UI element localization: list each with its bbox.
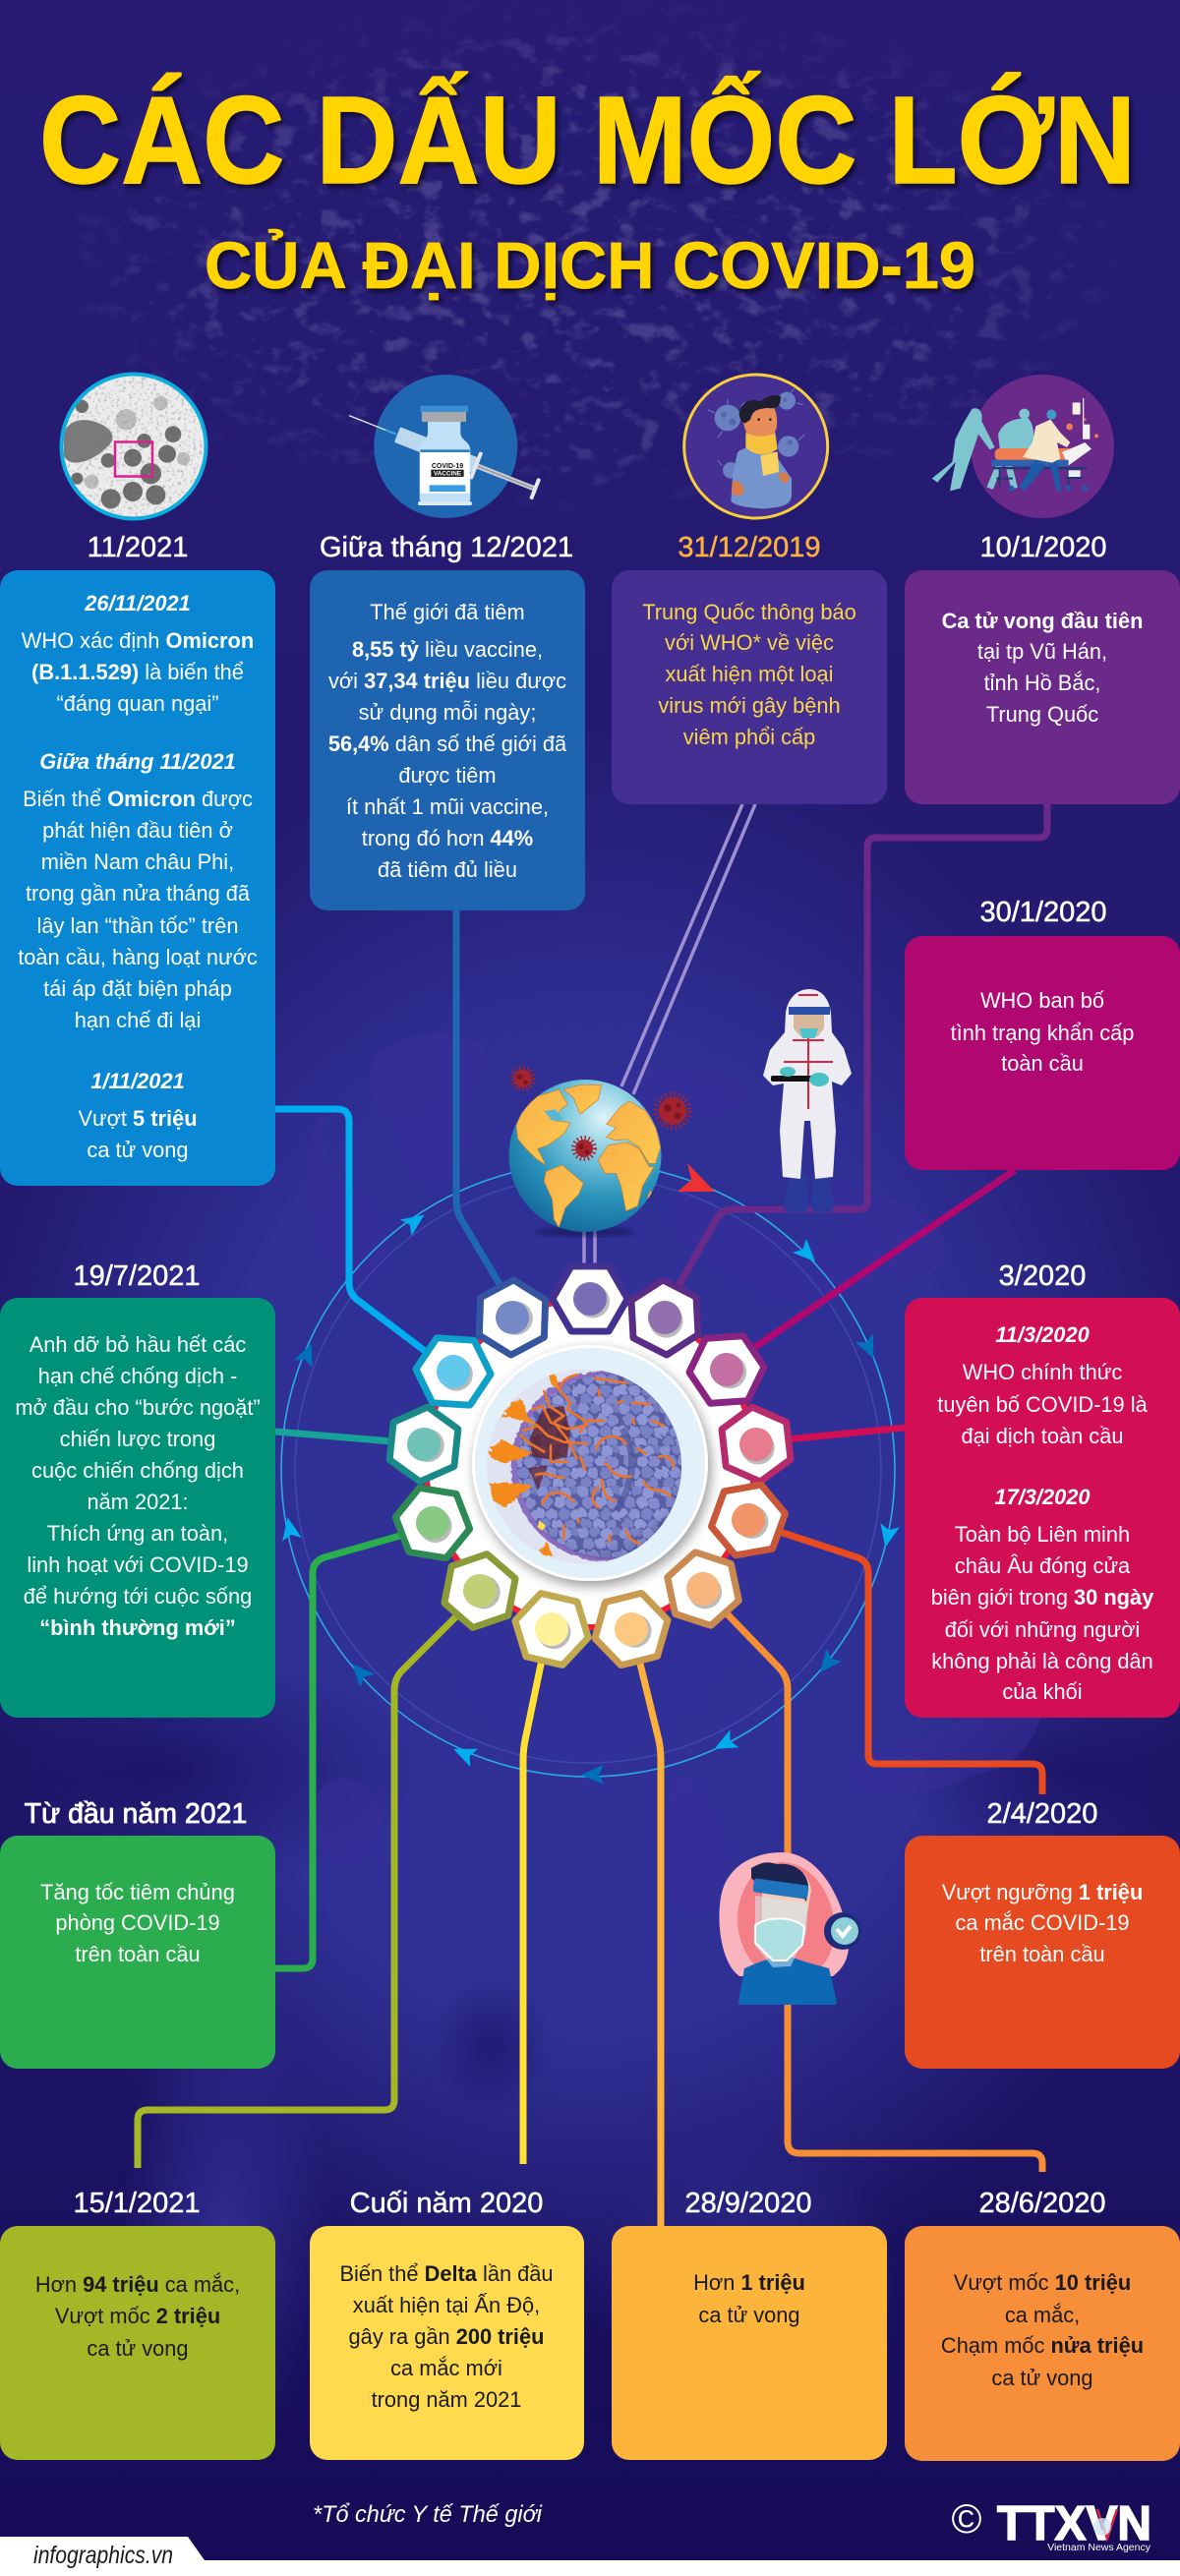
panel: Từ đầu năm 2021: phòng COVID-19	[55, 1910, 220, 1935]
panel: 28/6/2020: ca mắc,	[1005, 2303, 1080, 2327]
panel: Cuối năm 2020: trong năm 2021	[372, 2387, 521, 2412]
panel: 19/7/2021: Thích ứng an toàn,	[47, 1521, 228, 1546]
panel: 28/6/2020: Vượt mốc 10 triệu	[954, 2270, 1131, 2295]
panel: 15/1/2021: 15/1/2021	[73, 2188, 201, 2219]
vial label: COVID-19	[432, 463, 463, 470]
icon: coronavirus micrograph	[59, 372, 208, 521]
panel: 11/2021: toàn cầu, hàng loạt nước	[18, 945, 258, 969]
panel: 30/1/2020: WHO ban bố	[980, 988, 1104, 1013]
panel: Giữa tháng 12/2021: đã tiêm đủ liều	[378, 857, 517, 882]
panel: 15/1/2021: Vượt mốc 2 triệu	[55, 2304, 220, 2328]
panel: 3/2020: đại dịch toàn cầu	[962, 1424, 1123, 1448]
panel: 11/2021: ca tử vong	[87, 1138, 189, 1162]
vial label	[431, 463, 464, 478]
panel: 10/1/2020: tỉnh Hồ Bắc,	[984, 671, 1100, 695]
footnote: *Tổ chức Y tế Thế giới	[313, 2501, 543, 2528]
panel: 31/12/2019: viêm phổi cấp	[683, 725, 815, 749]
panel: 28/6/2020	[905, 2188, 1180, 2461]
panel: 10/1/2020: tại tp Vũ Hán,	[977, 639, 1107, 664]
panel: 11/2021: miền Nam châu Phi,	[41, 849, 234, 874]
date labels top row: 10/1/2020	[979, 532, 1107, 563]
panel: Giữa tháng 12/2021: 8,55 tỷ liều vaccine,	[352, 637, 543, 662]
panel: 10/1/2020	[905, 570, 1180, 804]
red arrow	[678, 1163, 715, 1192]
panel: 30/1/2020: 30/1/2020	[979, 897, 1107, 928]
panel: 11/2021: Giữa tháng 11/2021	[39, 749, 236, 774]
panel: 11/2021: “đáng quan ngại”	[57, 691, 218, 716]
panel: 11/2021: Biến thể Omicron được	[23, 787, 253, 811]
panel: 3/2020: 11/3/2020	[995, 1322, 1090, 1347]
source credit: infographics.vn	[33, 2542, 173, 2569]
panel: 31/12/2019: xuất hiện một loại	[665, 662, 834, 686]
panel: 11/2021: 1/11/2021	[90, 1069, 185, 1093]
panel: 19/7/2021: mở đầu cho “bước ngoặt”	[15, 1395, 261, 1420]
panel: Giữa tháng 12/2021: trong đó hơn 44%	[362, 826, 533, 850]
panel: 30/1/2020	[905, 897, 1180, 1170]
panel: 10/1/2020: Ca tử vong đầu tiên	[942, 609, 1143, 633]
panel: 19/7/2021: cuộc chiến chống dịch	[31, 1458, 244, 1483]
panel: Cuối năm 2020: gây ra gần 200 triệu	[349, 2324, 544, 2349]
date labels top row: 31/12/2019	[678, 532, 821, 563]
panel: 3/2020: không phải là công dân	[931, 1649, 1153, 1673]
panel: 28/9/2020: 28/9/2020	[684, 2188, 812, 2219]
panel: 11/2021: tái áp đặt biện pháp	[43, 976, 232, 1001]
icon: doctor with face shield	[719, 1852, 861, 2005]
subtitle: CỦA ĐẠI DỊCH COVID-19	[205, 229, 975, 303]
panel: 15/1/2021: Hơn 94 triệu ca mắc,	[35, 2272, 240, 2297]
panel: 2/4/2020: Vượt ngưỡng 1 triệu	[942, 1880, 1143, 1904]
panel: 11/2021: 26/11/2021	[84, 591, 191, 615]
footer strip	[0, 2537, 1180, 2576]
panel: Giữa tháng 12/2021: ít nhất 1 mũi vaccine,	[346, 794, 549, 819]
panel: 3/2020: 3/2020	[999, 1260, 1086, 1292]
panel: 3/2020: 17/3/2020	[994, 1485, 1091, 1509]
panel: Từ đầu năm 2021	[0, 1798, 275, 2069]
hexagon nodes	[378, 1267, 802, 1669]
panel: 3/2020: đối với những người	[945, 1617, 1140, 1642]
panel: 11/2021: trong gần nửa tháng đã	[26, 881, 251, 906]
virus core image	[472, 1345, 708, 1581]
panel: 31/12/2019: với WHO* về việc	[665, 630, 834, 655]
icon: sick person	[684, 375, 828, 518]
icon: medical worker in protective suit	[763, 989, 852, 1212]
panel: Cuối năm 2020: Biến thể Delta lần đầu	[339, 2261, 554, 2286]
panel: 28/9/2020: Hơn 1 triệu	[693, 2270, 805, 2295]
panel: 30/1/2020: toàn cầu	[1001, 1051, 1084, 1076]
panel: 3/2020: của khối	[1002, 1679, 1083, 1704]
panel: Cuối năm 2020	[310, 2188, 584, 2460]
panel: Giữa tháng 12/2021: với 37,34 triệu liều được	[328, 669, 566, 693]
panel: 11/2021: WHO xác định Omicron	[22, 628, 254, 653]
panel: 28/6/2020: ca tử vong	[991, 2366, 1093, 2390]
icon: vaccine vial and syringe	[344, 375, 542, 518]
panel: 19/7/2021: linh hoạt với COVID-19	[27, 1552, 249, 1577]
panel: Giữa tháng 12/2021: sử dụng mỗi ngày;	[359, 700, 536, 725]
panel: 28/9/2020	[612, 2188, 887, 2460]
panel: 19/7/2021: 19/7/2021	[73, 1260, 201, 1292]
panel: 3/2020: Toàn bộ Liên minh	[955, 1522, 1130, 1547]
panel: 3/2020: WHO chính thức	[963, 1360, 1122, 1384]
logo: TTXVN: ©	[952, 2495, 982, 2542]
panel: 3/2020	[905, 1260, 1180, 1718]
panel: 2/4/2020: 2/4/2020	[987, 1798, 1097, 1830]
panel: 11/2021: (B.1.1.529) là biến thể	[31, 660, 244, 684]
panel: 19/7/2021: chiến lược trong	[60, 1427, 215, 1451]
panel: 31/12/2019: Trung Quốc thông báo	[642, 600, 856, 624]
panel: Từ đầu năm 2021: trên toàn cầu	[75, 1942, 201, 1966]
panel: Giữa tháng 12/2021	[310, 570, 585, 910]
globe with viruses	[509, 1068, 715, 1237]
panel: 30/1/2020: tình trạng khẩn cấp	[951, 1021, 1134, 1045]
panel: 10/1/2020: Trung Quốc	[986, 702, 1098, 727]
panel: 2/4/2020	[905, 1798, 1180, 2069]
panel: Cuối năm 2020: Cuối năm 2020	[350, 2188, 543, 2219]
panel: 11/2021: lây lan “thần tốc” trên	[37, 913, 238, 938]
panel: Từ đầu năm 2021: Từ đầu năm 2021	[25, 1798, 247, 1830]
panel: 19/7/2021: “bình thường mới”	[39, 1615, 236, 1640]
logo: TTXVN: TTXVN	[997, 2497, 1151, 2550]
panel: 11/2021: hạn chế đi lại	[75, 1008, 201, 1032]
panel: 11/2021: Vượt 5 triệu	[78, 1106, 198, 1131]
icon: medical team with stretcher	[932, 375, 1114, 518]
panel: 3/2020: biên giới trong 30 ngày	[931, 1585, 1154, 1610]
panel: 28/6/2020: 28/6/2020	[978, 2188, 1106, 2219]
panel: 28/6/2020: Chạm mốc nửa triệu	[941, 2333, 1144, 2358]
panel: 19/7/2021: Anh dỡ bỏ hầu hết các	[30, 1332, 246, 1357]
panel: 3/2020: tuyên bố COVID-19 là	[937, 1392, 1148, 1417]
virus particles	[511, 1068, 689, 1159]
panel: 19/7/2021	[0, 1260, 275, 1718]
panel: 31/12/2019: virus mới gây bệnh	[658, 693, 841, 718]
panel: 11/2021: phát hiện đầu tiên ở	[42, 818, 233, 843]
logo: TTXVN	[952, 2495, 1151, 2553]
panel: 2/4/2020: trên toàn cầu	[979, 1942, 1105, 1966]
vial label: VACCINE	[434, 471, 461, 478]
panel: Cuối năm 2020: ca mắc mới	[390, 2356, 502, 2380]
connector lines	[138, 804, 1047, 2226]
panel: 19/7/2021: năm 2021:	[87, 1490, 189, 1514]
panel: 19/7/2021: để hướng tới cuộc sống	[24, 1584, 252, 1609]
panel: 19/7/2021: hạn chế chống dịch -	[38, 1364, 237, 1388]
panel: 11/2021	[0, 570, 275, 1186]
panel: 28/9/2020: ca tử vong	[698, 2303, 800, 2327]
panel: 15/1/2021	[0, 2188, 275, 2460]
panel: 15/1/2021: ca tử vong	[87, 2336, 189, 2361]
panel: Giữa tháng 12/2021: được tiêm	[398, 763, 497, 788]
panel: 31/12/2019	[612, 570, 887, 804]
date labels top row	[88, 532, 1107, 563]
panel: Giữa tháng 12/2021: Thế giới đã tiêm	[370, 600, 525, 624]
panel: Giữa tháng 12/2021: 56,4% dân số thế giới đã	[328, 732, 567, 756]
central hub	[378, 1267, 802, 1669]
panel: Từ đầu năm 2021: Tăng tốc tiêm chủng	[40, 1880, 235, 1904]
date labels top row: 11/2021	[88, 532, 188, 563]
outer timeline ring	[278, 1163, 900, 1785]
title	[39, 71, 1136, 303]
logo: TTXVN: Vietnam News Agency	[1047, 2542, 1151, 2553]
date labels top row: Giữa tháng 12/2021	[320, 532, 573, 563]
panel: Cuối năm 2020: xuất hiện tại Ấn Độ,	[353, 2293, 540, 2317]
panel: 3/2020: châu Âu đóng cửa	[955, 1553, 1131, 1578]
panel: 2/4/2020: ca mắc COVID-19	[955, 1910, 1130, 1935]
